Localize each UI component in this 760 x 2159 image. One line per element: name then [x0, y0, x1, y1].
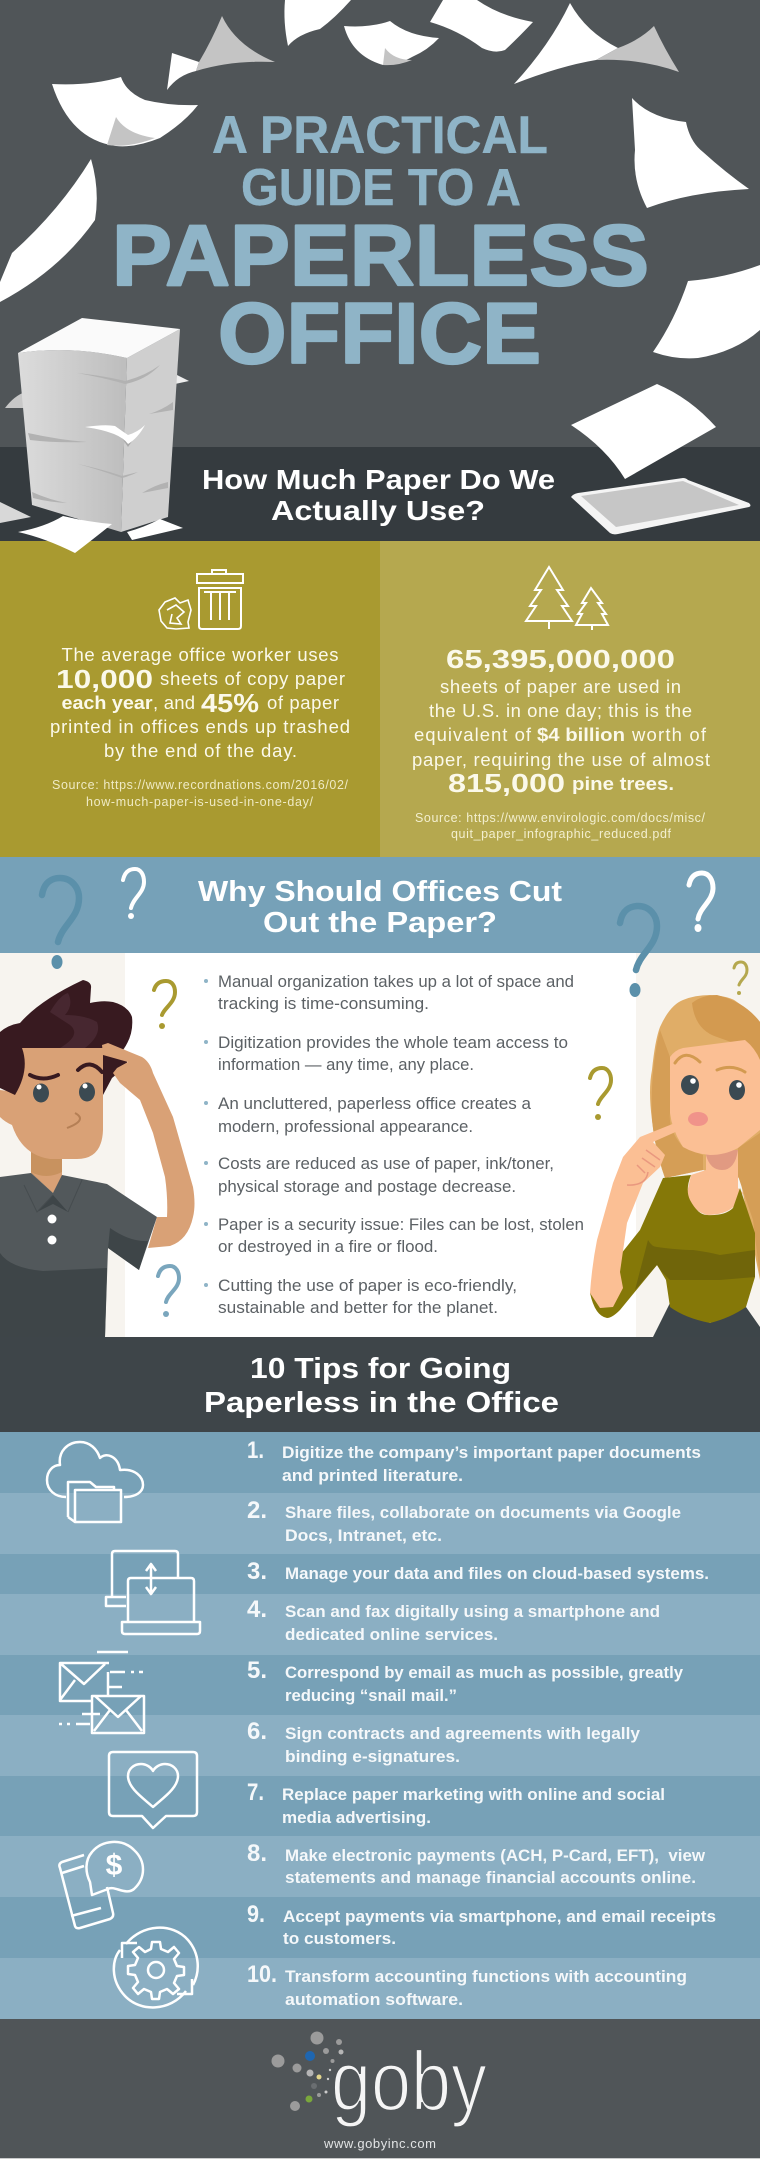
logo wordmark: goby	[331, 2034, 487, 2128]
man shirt	[0, 1173, 157, 1337]
man arm and hand	[102, 1043, 194, 1248]
stack top	[18, 318, 180, 358]
tip 10: 10.	[247, 1961, 277, 1988]
icon: phone payment	[59, 1842, 143, 1928]
text block: office worker stat: , and	[153, 692, 195, 713]
icon: trash can with crumpled paper	[159, 570, 243, 629]
panel: hero dark band	[0, 447, 760, 541]
tip 6: 6.	[247, 1718, 267, 1745]
title line 2: GUIDE TO A	[241, 159, 521, 217]
tip 4: Scan and fax digitally using a smartphone and	[285, 1602, 660, 1621]
icon: heart speech bubble	[109, 1752, 197, 1828]
text block: US usage stat: sheets of paper are used in	[440, 676, 681, 697]
paper sheet curled left	[52, 77, 198, 146]
icon: email exchange	[59, 1652, 144, 1733]
bullet 1: Manual organization takes up a lot of space and	[218, 972, 574, 991]
woman top shadow	[635, 1240, 755, 1290]
tip 3: 3.	[247, 1558, 267, 1585]
icon: white question mark right	[689, 873, 713, 932]
heading: how much paper: How Much Paper Do We	[202, 464, 555, 495]
tip 8: 8.	[247, 1840, 267, 1867]
text block: office worker stat	[50, 644, 350, 761]
text block: office worker stat: The average office worker uses	[62, 644, 338, 665]
tip 8: Make electronic payments (ACH, P-Card, EFT), view	[285, 1846, 706, 1865]
source: recordnations: Source: https://www.recordnations.com/2016/02/	[52, 778, 349, 792]
icon: blue question mark low	[158, 1266, 179, 1317]
man neck	[31, 1150, 62, 1193]
man shirt lower shadow	[0, 1253, 107, 1337]
stack front	[18, 350, 127, 532]
crumpled sheet in stack	[85, 425, 145, 447]
crumpled paper	[159, 598, 191, 629]
tip 1: and printed literature.	[282, 1466, 463, 1485]
woman hair shade	[692, 995, 760, 1060]
tip 6: binding e-signatures.	[285, 1747, 460, 1766]
bullet 2	[204, 1033, 568, 1074]
panel: why body side background	[0, 953, 760, 1337]
tip 8: statements and manage financial accounts online.	[285, 1868, 696, 1887]
woman hair left shade	[652, 1030, 703, 1178]
panel: hero background	[0, 0, 760, 447]
man hair	[0, 980, 132, 1095]
text block: US usage stat: the U.S. in one day; this is the	[429, 700, 692, 721]
woman hand lines	[627, 1150, 660, 1185]
tip 10	[247, 1961, 687, 2009]
stack right side	[121, 329, 180, 532]
paper sheet top	[284, 0, 351, 46]
heading: 10 tips: 10 Tips for Going	[250, 1353, 511, 1385]
tip 5: reducing “snail mail.”	[285, 1686, 457, 1705]
bullet 2: information — any time, any place.	[218, 1055, 474, 1074]
dollar sign: $	[106, 1849, 123, 1882]
panel: why body white	[125, 953, 636, 1337]
bullet 5: or destroyed in a fire or flood.	[218, 1237, 438, 1256]
trash can	[197, 570, 243, 629]
man face	[0, 1048, 103, 1159]
tip 5: Correspond by email as much as possible, greatly	[285, 1663, 684, 1682]
bullet 5: Paper is a security issue: Files can be lost, stolen	[218, 1215, 584, 1234]
logo: goby	[272, 2032, 487, 2128]
bullet 1	[204, 972, 574, 1013]
text block: US usage stat: worth of	[631, 724, 707, 745]
paper sheet curled top centre	[344, 21, 439, 65]
tip 7	[247, 1779, 665, 1827]
panel: tips header	[0, 1337, 760, 1432]
heading: how much paper: Actually Use?	[271, 495, 485, 526]
tip 10: automation software.	[285, 1990, 463, 2009]
bullet 1: tracking is time-consuming.	[218, 994, 429, 1013]
man eyes and brows	[30, 1064, 102, 1128]
bullet 3: An uncluttered, paperless office creates a	[218, 1094, 532, 1113]
panel: why header	[0, 857, 760, 953]
paper sheet folded top left	[167, 16, 275, 90]
heading: how much paper	[202, 464, 555, 526]
tip 2	[247, 1497, 681, 1545]
bullet 4: physical storage and postage decrease.	[218, 1177, 516, 1196]
man sleeve shadow	[108, 1228, 148, 1270]
illustration: puzzled man	[0, 980, 194, 1337]
bullet 6	[204, 1276, 517, 1317]
icon: large question mark left	[42, 878, 79, 969]
text block: office worker stat: by the end of the day.	[104, 740, 297, 761]
text block: US usage stat	[412, 644, 710, 798]
tip 7: 7.	[247, 1779, 264, 1806]
source: recordnations	[52, 778, 349, 809]
icon: white question mark left	[123, 869, 144, 919]
text block: office worker stat: printed in offices ends up trashed	[50, 716, 350, 737]
bullet 3	[204, 1094, 532, 1136]
woman eyes, brows and lips	[675, 1055, 745, 1126]
tip 2: Docs, Intranet, etc.	[285, 1526, 442, 1545]
man buttons	[48, 1214, 56, 1244]
crease marks	[28, 365, 173, 503]
icon: olive question mark left	[154, 981, 175, 1029]
text block: US usage stat: pine trees.	[572, 773, 674, 794]
bullet 4: Costs are reduced as use of paper, ink/toner,	[218, 1154, 554, 1173]
tip 7: media advertising.	[282, 1808, 431, 1827]
text block: US usage stat: paper, requiring the use of almost	[412, 749, 710, 770]
bullet 3: modern, professional appearance.	[218, 1117, 473, 1136]
tip 6: Sign contracts and agreements with legally	[285, 1724, 641, 1743]
source: envirologic: Source: https://www.envirologic.com/docs/misc/	[415, 811, 706, 825]
woman neck shadow	[706, 1150, 738, 1170]
title line 1: A PRACTICAL	[212, 106, 548, 165]
paper sheet far left	[0, 159, 97, 302]
paper sheet falling above tablet	[571, 384, 716, 479]
tip 10: Transform accounting functions with accounting	[285, 1967, 687, 1986]
icon: large question mark right	[620, 906, 657, 997]
bottom edge	[0, 2158, 760, 2159]
panel: stat right	[380, 541, 760, 857]
woman skirt	[653, 1303, 760, 1337]
woman arm and hand	[590, 1123, 680, 1308]
text block: US usage stat: 815,000	[448, 768, 565, 798]
icon: pine trees	[526, 567, 608, 630]
source: recordnations: how-much-paper-is-used-in-one-day/	[86, 795, 314, 809]
icon: gear with cycle arrows	[114, 1928, 198, 2007]
tips list	[247, 1437, 716, 2009]
bullet 4	[204, 1154, 554, 1196]
tip 3	[247, 1558, 709, 1585]
heading: 10 tips	[204, 1353, 559, 1419]
tip 9: 9.	[247, 1901, 265, 1928]
paper sheet folded top right	[514, 3, 679, 84]
bullet 2: Digitization provides the whole team access to	[218, 1033, 568, 1052]
man hair highlight	[50, 993, 98, 1048]
bullet 6: Cutting the use of paper is eco-friendly,	[218, 1276, 517, 1295]
woman top	[590, 1175, 755, 1323]
website url: www.gobyinc.com	[323, 2136, 436, 2151]
text block: office worker stat: 10,000	[56, 664, 153, 694]
text block: office worker stat: 45%	[201, 688, 259, 718]
panel: footer	[0, 2019, 760, 2159]
paper sheet right	[632, 98, 749, 208]
tip 4	[247, 1596, 660, 1644]
paper sheet top right of centre	[430, 0, 533, 52]
man collar	[24, 1180, 82, 1212]
tip 5	[247, 1657, 684, 1705]
tip 1: Digitize the company’s important paper documents	[282, 1443, 701, 1462]
title line 4: OFFICE	[218, 286, 541, 382]
bullet 6: sustainable and better for the planet.	[218, 1298, 498, 1317]
bullet 5	[204, 1215, 584, 1256]
tip 8	[247, 1840, 706, 1887]
heading: 10 tips: Paperless in the Office	[204, 1387, 559, 1419]
heading: why should offices: Why Should Offices Cut	[198, 876, 562, 908]
tip 9	[247, 1901, 716, 1948]
tip 5: 5.	[247, 1657, 267, 1684]
text block: office worker stat: of paper	[267, 692, 339, 713]
panel: stat left	[0, 541, 380, 857]
woman hair	[650, 995, 760, 1280]
icon: olive question mark right	[590, 1068, 611, 1120]
flying papers	[0, 0, 760, 479]
loose papers behind stack	[0, 375, 189, 523]
tip 9: Accept payments via smartphone, and email receipts	[283, 1907, 716, 1926]
heading: why should offices	[198, 876, 562, 939]
tip 6	[247, 1718, 641, 1766]
source: envirologic	[415, 811, 706, 841]
tip 4: dedicated online services.	[285, 1625, 498, 1644]
tip 2: 2.	[247, 1497, 267, 1524]
icon: cloud folder	[47, 1442, 143, 1522]
tip 7: Replace paper marketing with online and social	[282, 1785, 665, 1804]
text block: US usage stat: equivalent of	[414, 724, 532, 745]
text block: office worker stat: sheets of copy paper	[160, 668, 345, 689]
icon: small olive question mark	[734, 962, 747, 995]
bullet list	[204, 972, 584, 1317]
woman face	[670, 1040, 760, 1155]
title line 3: PAPERLESS	[112, 208, 649, 304]
title	[112, 106, 649, 382]
text block: US usage stat: 65,395,000,000	[446, 644, 675, 674]
tip 2: Share files, collaborate on documents via Google	[285, 1503, 681, 1522]
man neck front	[31, 1172, 62, 1193]
woman neck and chest	[687, 1150, 743, 1215]
loose papers on floor	[18, 516, 183, 553]
illustration: paper stack	[0, 318, 189, 553]
tip 3: Manage your data and files on cloud-based systems.	[285, 1564, 709, 1583]
tip 1: 1.	[247, 1437, 264, 1464]
logo dots	[272, 2032, 344, 2111]
icon: tablet	[571, 478, 750, 534]
paper sheet right lower	[653, 265, 760, 358]
tip 1	[247, 1437, 701, 1485]
tips striped rows	[0, 1432, 760, 2019]
tip 9: to customers.	[283, 1929, 396, 1948]
tip 4: 4.	[247, 1596, 267, 1623]
icon: laptop and tablet sync	[106, 1551, 200, 1634]
woman hair right	[737, 1133, 760, 1277]
text block: office worker stat: each year	[62, 693, 152, 713]
source: envirologic: quit_paper_infographic_reduced.pdf	[451, 827, 672, 841]
heading: why should offices: Out the Paper?	[263, 907, 497, 939]
illustration: puzzled woman	[590, 995, 760, 1337]
text block: US usage stat: $4 billion	[537, 724, 625, 745]
